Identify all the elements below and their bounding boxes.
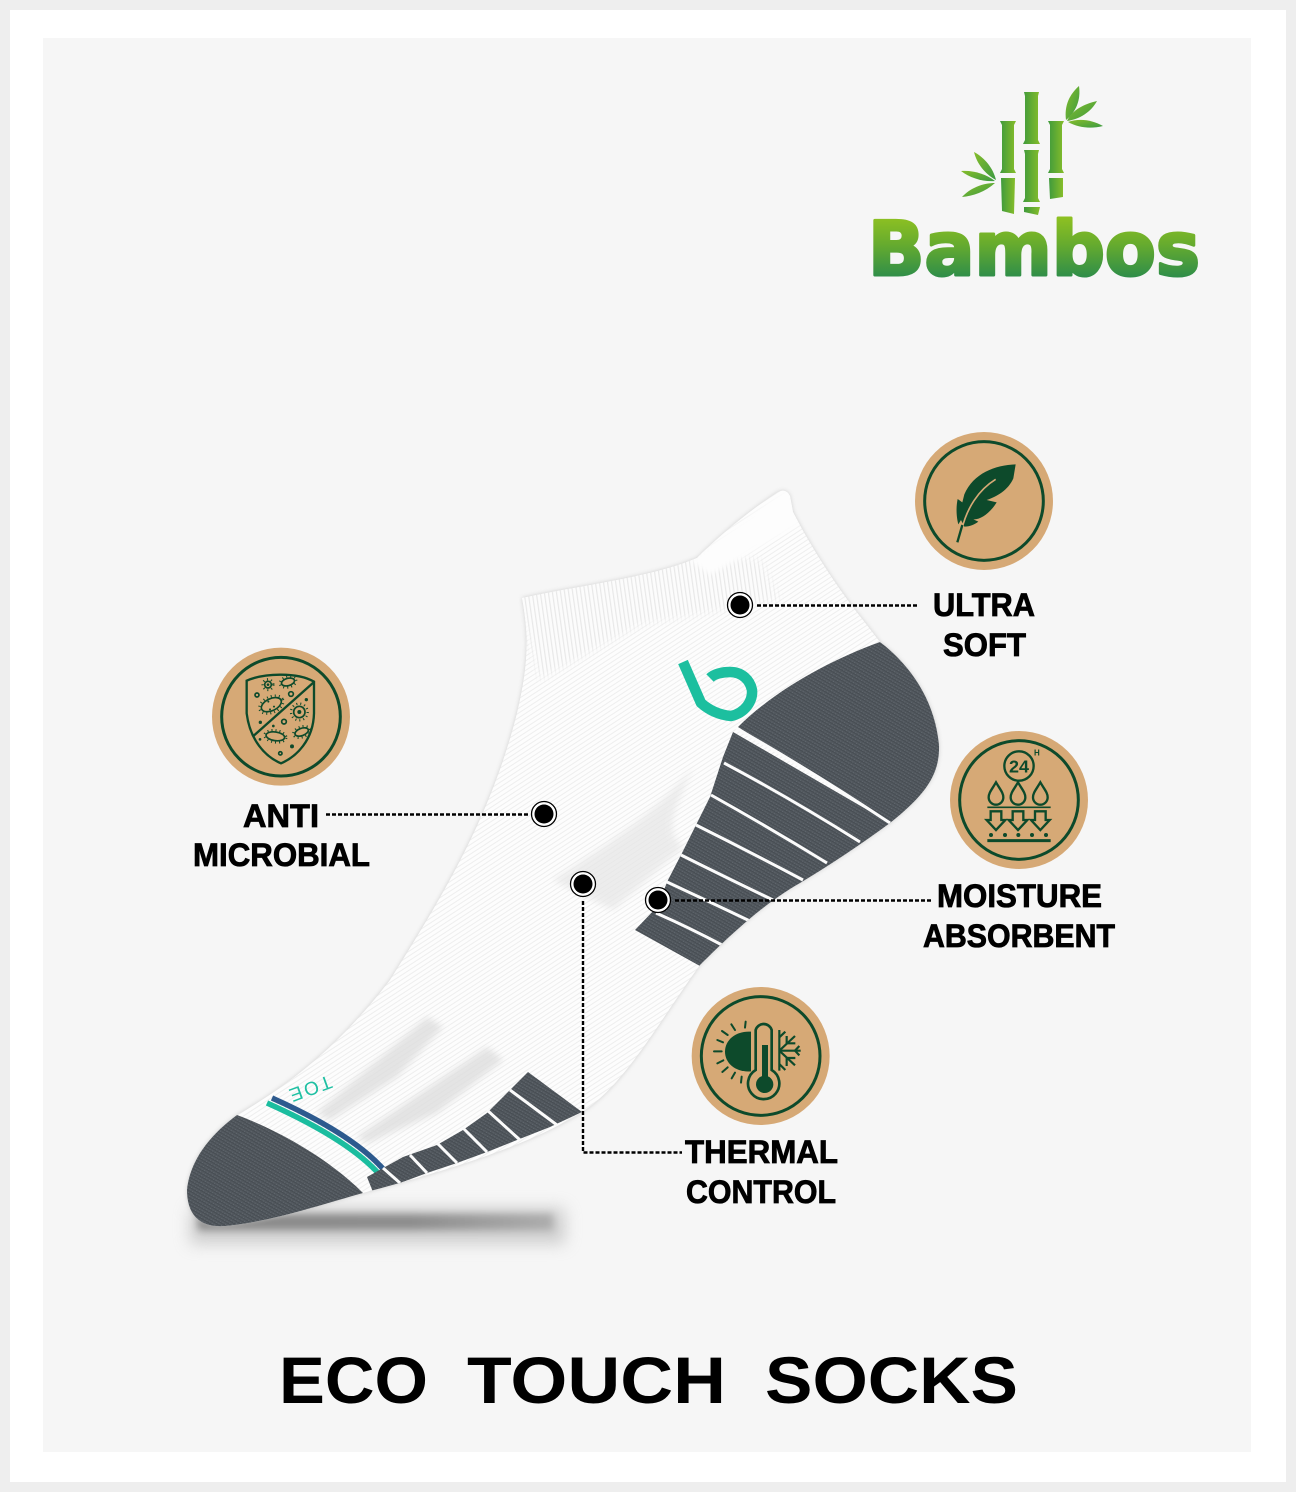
label: THERMAL <box>685 1134 838 1170</box>
sock ground shadow <box>190 1208 565 1244</box>
toe stripes <box>267 1098 384 1174</box>
callout: moisture absorbent <box>646 731 1115 954</box>
sock body <box>170 480 960 1250</box>
icon: feather <box>915 432 1053 570</box>
callout: anti microbial <box>193 648 556 873</box>
leader line <box>326 802 556 826</box>
callout: thermal control <box>570 872 838 1210</box>
brand mark <box>683 662 752 716</box>
callout: ultra soft <box>728 432 1053 663</box>
sock illustration <box>170 480 960 1250</box>
label: ULTRA <box>933 587 1035 623</box>
leader line <box>728 592 918 618</box>
white stripes <box>656 728 890 945</box>
label: SOFT <box>943 627 1026 663</box>
label: MOISTURE <box>937 878 1102 914</box>
title: ECO <box>279 1343 428 1417</box>
title: TOUCH <box>467 1343 726 1417</box>
icon: thermometer with sun and snowflake <box>692 987 830 1125</box>
arch shading <box>558 780 686 908</box>
leader line <box>646 888 932 912</box>
icon: shield with microbes <box>212 648 350 786</box>
forefoot shading <box>317 1017 503 1143</box>
icon: 24h moisture drops <box>950 731 1088 869</box>
logo: Bambos <box>868 86 1200 293</box>
label <box>193 798 370 873</box>
heel patch <box>738 642 960 823</box>
label: CONTROL <box>686 1174 836 1210</box>
logo wordmark: Bambos <box>868 205 1200 293</box>
label <box>933 587 1035 663</box>
label: ANTI <box>243 798 319 834</box>
icon: 24h moisture drops: 24 <box>1009 756 1029 776</box>
label <box>685 1134 838 1210</box>
label: ABSORBENT <box>923 918 1115 954</box>
icon: bamboo stalks and leaves <box>961 86 1103 215</box>
toe patch <box>187 1115 363 1226</box>
label: MICROBIAL <box>193 837 370 873</box>
sole stripe blocks <box>367 1072 582 1192</box>
title <box>279 1343 1018 1417</box>
label <box>923 878 1115 954</box>
toe label: TOE <box>284 1070 334 1106</box>
icon: 24h moisture drops: H <box>1034 748 1040 757</box>
striped arch band <box>635 732 890 966</box>
leader line <box>570 872 682 1152</box>
title: SOCKS <box>765 1343 1018 1417</box>
heel tab <box>693 492 798 574</box>
